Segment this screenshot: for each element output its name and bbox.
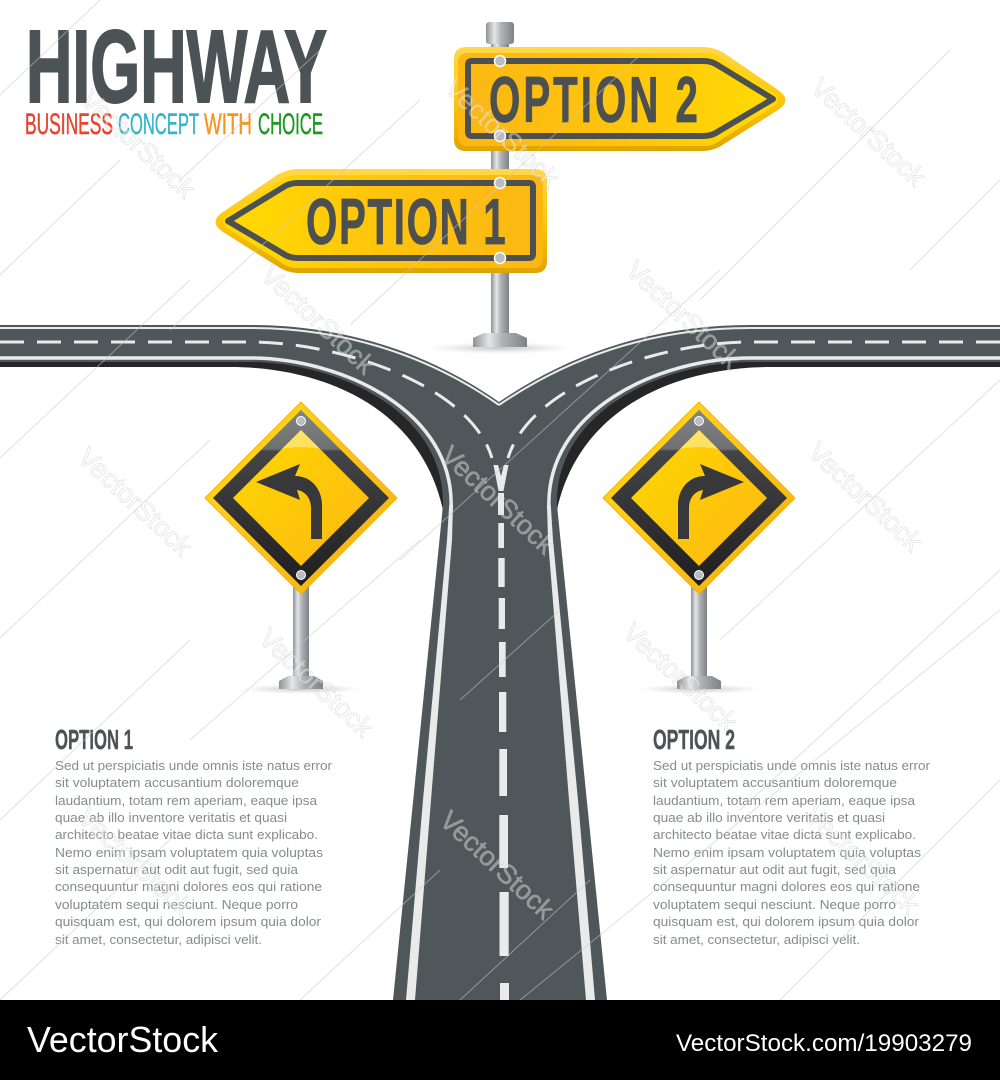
post [491, 40, 509, 335]
text block: option 2 [653, 724, 931, 947]
body text: consequuntur magni dolores eos qui ratione [55, 879, 322, 894]
body text: architecto beatae vitae dicta sunt explicabo. [55, 827, 318, 842]
icon: right arrow [678, 464, 744, 539]
subtitle: WITH [204, 108, 252, 141]
body text: consequuntur magni dolores eos qui ratione [653, 879, 920, 894]
body text: quae ab illo inventore veritatis et quasi [55, 810, 287, 825]
body text: sit aspernatur aut odit aut fugit, sed quia [55, 862, 299, 877]
title [25, 9, 327, 141]
icon: left arrow [256, 464, 322, 539]
road surface [0, 325, 1000, 1000]
road shadow [0, 345, 1000, 510]
bolts [494, 178, 506, 264]
footer url: VectorStock.com/19903279 [676, 1030, 972, 1057]
body text: laudantium, totam rem aperiam, eaque ipsa [55, 793, 318, 808]
body text: Nemo enim ipsam voluptatem quia voluptas [653, 845, 922, 860]
body text: sit amet, consectetur, adipisci velit. [55, 932, 262, 947]
body text: voluptatem sequi nesciunt. Neque porro [55, 897, 298, 912]
watermark: VectorStock [255, 260, 381, 380]
left turn sign [205, 402, 397, 694]
subtitle [25, 108, 323, 141]
post cap [486, 22, 514, 44]
post shadow [425, 342, 575, 354]
watermark: VectorStock [75, 84, 201, 204]
post base [473, 333, 527, 347]
body text: quisquam est, qui dolorem ipsum quia dolor [55, 914, 322, 929]
body text: laudantium, totam rem aperiam, eaque ipsa [653, 793, 916, 808]
body text: architecto beatae vitae dicta sunt explicabo. [653, 827, 916, 842]
body text: sit aspernatur aut odit aut fugit, sed quia [653, 862, 897, 877]
watermark: VectorStock [802, 437, 928, 557]
body text: Nemo enim ipsam voluptatem quia voluptas [55, 845, 324, 860]
text block: option 1 [55, 724, 333, 947]
body text: quisquam est, qui dolorem ipsum quia dolor [653, 914, 920, 929]
body text: voluptatem sequi nesciunt. Neque porro [653, 897, 896, 912]
road [0, 325, 1000, 1000]
sign: option 1 [216, 169, 547, 273]
watermark: VectorStock [253, 623, 379, 743]
heading: option 1: OPTION 1 [55, 724, 133, 755]
main signpost [216, 22, 786, 354]
centre lane dashes [494, 465, 509, 1000]
right road edge lines [499, 328, 1000, 1000]
body text: sit amet, consectetur, adipisci velit. [653, 932, 860, 947]
watermark: VectorStock [72, 442, 198, 562]
subtitle: BUSINESS [25, 108, 113, 141]
body text [55, 758, 333, 947]
subtitle: CHOICE [258, 108, 323, 141]
body text: sit voluptatem accusantium doloremque [55, 775, 299, 790]
watermark: VectorStock [620, 255, 746, 375]
body text: Sed ut perspiciatis unde omnis iste natus error [55, 758, 333, 773]
footer bar [0, 1000, 1000, 1080]
body text: sit voluptatem accusantium doloremque [653, 775, 897, 790]
bolts [494, 56, 506, 142]
subtitle: CONCEPT [118, 108, 199, 141]
watermark: VectorStock [617, 617, 743, 737]
heading: option 2: OPTION 2 [653, 724, 735, 755]
sign text: option 1: OPTION 1 [306, 186, 506, 258]
body text: quae ab illo inventore veritatis et quasi [653, 810, 885, 825]
watermark: VectorStock [435, 440, 561, 560]
watermark: VectorStock [805, 72, 931, 192]
title: HIGHWAY: HIGHWAY [26, 9, 327, 124]
watermark: VectorStock [799, 800, 925, 920]
watermark: VectorStock [434, 805, 560, 925]
right turn sign [603, 402, 795, 694]
watermark: VectorStock [439, 73, 565, 193]
footer logo: VectorStock [27, 1019, 219, 1060]
body text [653, 758, 931, 947]
left road edge lines [0, 328, 499, 1000]
sign text: option 2: OPTION 2 [489, 64, 698, 136]
curved lane dashes [0, 342, 1000, 458]
watermark: VectorStock [72, 802, 198, 922]
body text: Sed ut perspiciatis unde omnis iste natus error [653, 758, 931, 773]
sign: option 2 [454, 47, 786, 151]
